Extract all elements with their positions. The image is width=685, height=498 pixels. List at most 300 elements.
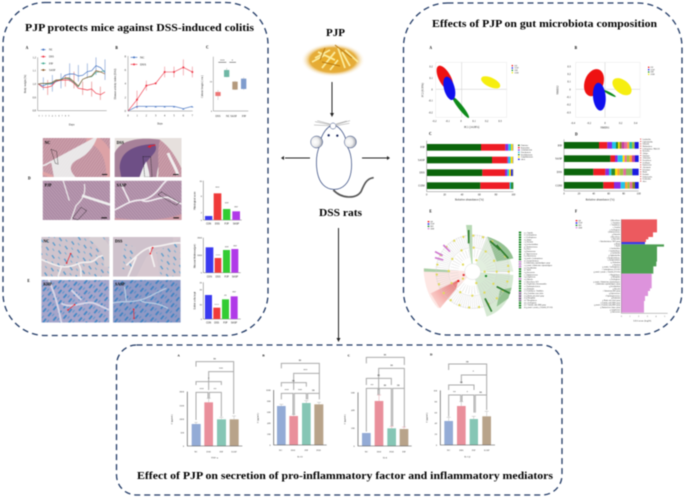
cladogram E: LEfSe: COM [430, 228, 435, 230]
stacked bar chart D: genus abundance: Parabacteroides [643, 176, 652, 178]
bar chart F: LDA score: 5 [664, 316, 665, 318]
bar chart D: IL-1β: ns [479, 391, 482, 394]
stacked bar chart D: genus abundance: DSS [557, 170, 562, 174]
bar chart C: IL-6: PJP [402, 450, 406, 453]
legend: cladogram taxa: s: f_Staphylococcaceae [524, 273, 538, 276]
bar chart E: goblet cells: 10 [200, 304, 203, 306]
bar chart D: IL-1β: 80 [435, 400, 438, 403]
bar chart A: TNF-α: *** [219, 367, 224, 370]
image: PJP noodles [301, 43, 365, 77]
bar chart E: goblet cells: 0 [201, 319, 203, 321]
bar chart B: IL-10 [256, 354, 327, 458]
bar chart D: IL-1β: ns [460, 381, 463, 384]
bar chart C: IL-6: ** [371, 384, 374, 387]
scatter chart B: NMDS: SASP [651, 68, 655, 71]
stacked bar chart D: genus abundance: Ligilactobacillus [643, 140, 653, 143]
stacked bar chart C: phylum abundance: Actinobacteriota [521, 149, 532, 152]
legend: cladogram taxa: y: g_Romboutsia [524, 287, 535, 290]
line chart A: body weight [24, 46, 107, 126]
stacked bar chart C: phylum abundance: Relative abundance (%) [455, 198, 484, 202]
icon: rat [311, 121, 374, 197]
stacked bar chart C: phylum abundance: DSS [419, 171, 425, 175]
stacked bar chart C: phylum abundance: Proteobacteria [521, 152, 531, 154]
legend: cladogram taxa: q: c_Bacilli [524, 269, 531, 272]
scatter chart B: NMDS: 0.2 [619, 122, 623, 125]
scatter chart A: PCA: DSS [515, 70, 518, 72]
stacked bar chart D: genus abundance: D [575, 133, 578, 137]
arrow: to bottom panel [336, 228, 340, 342]
stacked bar chart C: phylum abundance: 60 [478, 193, 481, 196]
scatter chart B: NMDS: -0.4 [571, 122, 576, 125]
scatter chart A: PCA [421, 46, 519, 129]
bar chart E: goblet cells: 20 [200, 290, 203, 292]
stacked bar chart D: genus abundance: SASP [555, 157, 562, 161]
bar chart A: TNF-α: 500 [180, 432, 185, 435]
stacked bar chart D: genus abundance: Lachnospiraceae_NK4A136 [643, 147, 660, 150]
bar chart F: LDA score: g_Blautia [614, 242, 620, 245]
bar chart C: IL-6: C [348, 353, 351, 357]
bar chart D: IL-1β: 0 [436, 444, 438, 447]
bar chart E: mucosal thickness: PJP [225, 276, 229, 278]
bar chart C: IL-6: ns [384, 353, 386, 356]
bar chart D: IL-1β: * [467, 391, 469, 394]
line chart B: disease activity index: 6 [125, 69, 127, 72]
scatter chart A: PCA: 0.1 [429, 77, 433, 80]
bar chart F: LDA score: g_Romboutsia [611, 297, 620, 300]
bar chart C: IL-6 [343, 353, 412, 460]
bar chart A: TNF-α: 2000 [179, 391, 185, 394]
image: SASP AB-PAS [112, 279, 182, 324]
legend: cladogram taxa: a6: g_norank_f_norank_o_Clostridia_UCG-014 [524, 306, 553, 309]
line chart A: body weight: 0.9 [33, 96, 37, 99]
box chart C: colon length: PJP [242, 115, 247, 118]
line chart B: disease activity index: Days [157, 122, 163, 125]
stacked bar chart D: genus abundance: Lactobacillus [643, 139, 651, 141]
scatter chart B: NMDS: 0.1 [567, 81, 571, 84]
line chart B: disease activity index: 7 [192, 115, 194, 118]
image: DSS H&E: DSS [117, 140, 125, 145]
scatter chart B: NMDS: -0.3 [566, 111, 571, 114]
bar chart D: histological score [194, 181, 242, 226]
stacked bar chart D: genus abundance: Helicobacter [643, 169, 651, 171]
bar chart C: IL-6: NC [365, 450, 368, 453]
bar chart F: LDA score: g_Allobaculum [610, 261, 621, 264]
stacked bar chart C: phylum abundance: 80 [495, 193, 498, 196]
bar chart B: IL-10: 400 [267, 422, 271, 425]
bar chart B: IL-10: C (pg/mL) [256, 413, 259, 423]
stacked bar chart D: genus abundance: Alistipes [643, 152, 648, 155]
line chart A: body weight: 1.0 [33, 83, 37, 86]
bar chart E: goblet cells: **** [214, 303, 220, 306]
bar chart C: IL-6: ns [390, 364, 393, 367]
stacked bar chart D: genus abundance: PJP [558, 144, 562, 148]
bar chart D: histological score: 2 [201, 212, 203, 214]
bar chart E: mucosal thickness [194, 238, 241, 278]
line chart B: disease activity index [114, 46, 194, 125]
stacked bar chart D: genus abundance: Muribaculaceae [643, 146, 652, 148]
stacked bar chart C: phylum abundance: PJP [420, 145, 425, 149]
line chart B: disease activity index: 5 [173, 115, 175, 118]
legend: cladogram taxa: d: g_Blautia [524, 238, 532, 241]
line chart B: disease activity index: 0 [125, 110, 127, 113]
legend: cladogram taxa: o: g_norank_f_Eubacterium_coprostanoligenes [524, 264, 553, 267]
bar chart F: LDA score: COM [578, 227, 583, 229]
bar chart F: LDA score: f_Rikenellaceae [610, 219, 620, 222]
bar chart F: LDA score: f_Ruminococcaceae [607, 231, 620, 234]
bar chart F: LDA score: 0 [621, 316, 622, 318]
scatter chart B: NMDS: -0.2 [587, 122, 592, 125]
legend: cladogram taxa: j: f_Butyricicoccaceae [523, 252, 538, 255]
bar chart D: IL-1β: 20 [435, 433, 438, 436]
panel: Effects of PJP on gut microbiota composition [404, 3, 682, 335]
bar chart D: histological score: Histological score [194, 191, 197, 210]
bar chart B: IL-10: IL-10 [297, 455, 303, 458]
stacked bar chart C: phylum abundance: 0 [426, 193, 428, 196]
line chart B: disease activity index: 6 [183, 115, 185, 118]
bar chart F: LDA score: f_Erysipelotrichaceae [607, 256, 620, 259]
bar chart F: LDA score: g_Enterococcus [610, 311, 620, 314]
bar chart A: TNF-α: * [208, 377, 210, 380]
bar chart F: LDA score: f_Enterobacteriaceae_RF39_group [599, 240, 620, 243]
bar chart C: IL-6: DSS [377, 450, 382, 453]
bar chart B: IL-10: 0 [269, 444, 271, 447]
legend: cladogram taxa: c: f_Oscillospiraceae [524, 236, 537, 239]
legend: cladogram taxa [520, 232, 553, 309]
bar chart F: LDA score: f_Eubacterium_coprostanoligenes_group [595, 283, 620, 286]
legend: cladogram taxa: a: o_Clostridia [524, 232, 533, 234]
bar chart E: goblet cells: CON [206, 323, 212, 325]
line chart A: body weight: 1.1 [33, 70, 37, 73]
legend: cladogram taxa: a0: g_Clostridium_sensu_stricto [524, 292, 544, 295]
bar chart D: histological score: PJP [225, 224, 229, 226]
bar chart A: TNF-α: TNF- α [211, 457, 219, 460]
line chart A: body weight: PJP [49, 62, 54, 65]
bar chart D: histological score: CON [206, 224, 212, 226]
bar chart E: goblet cells: ### [232, 291, 237, 294]
bar chart D: IL-1β: SASP [484, 449, 490, 452]
bar chart C: IL-6: ns [377, 374, 380, 377]
stacked bar chart D: genus abundance: Akkermansia [643, 166, 651, 169]
stacked bar chart C: phylum abundance: Bacteroidota [521, 147, 530, 149]
bar chart B: IL-10: 600 [267, 411, 271, 414]
bar chart D: histological score: DSS [215, 224, 220, 226]
image: NC AB-PAS [40, 236, 110, 278]
bar chart D: histological score: 0 [201, 220, 203, 222]
scatter chart B: NMDS: -0.1 [566, 96, 571, 99]
line chart B: disease activity index: 2 [125, 96, 127, 99]
bar chart C: IL-6: ns [384, 384, 386, 387]
line chart B: disease activity index: Disease activity index (DAI) [114, 69, 117, 99]
bar chart E: mucosal thickness: 2000 [197, 238, 203, 240]
bar chart E: goblet cells: 25 [200, 282, 203, 284]
line chart B: disease activity index: NC [140, 56, 145, 60]
scatter chart B: NMDS: COM [651, 74, 655, 76]
scatter chart B: NMDS: 0.3 [567, 65, 571, 68]
bar chart F: LDA score: f_Rikenellaceae [610, 235, 620, 238]
bar chart B: IL-10: *** [303, 369, 308, 372]
bar chart F: LDA score: g_Faecalibaculum [609, 285, 621, 288]
bar chart B: IL-10: DSS [291, 449, 296, 452]
image: NC AB-PAS: NC [43, 239, 49, 244]
bar chart F: LDA score: g_Monoglobus [611, 276, 620, 279]
line chart B: disease activity index: B [115, 46, 118, 50]
bar chart F: LDA score: o_Clostridiales [611, 222, 620, 224]
panel: Effect of PJP on secretion of pro-inflammatory factor and inflammatory mediators [116, 345, 562, 495]
scatter chart B: NMDS: PJP [651, 67, 653, 69]
bar chart B: IL-10: *** [285, 389, 289, 392]
label: DSS rats: DSS rats [319, 207, 363, 219]
line chart B: disease activity index: 2 [146, 115, 148, 118]
scatter chart A: PCA: 0.3 [498, 120, 502, 123]
bar chart D: IL-1β [426, 353, 495, 458]
box chart C: colon length: *** [220, 58, 225, 62]
stacked bar chart C: phylum abundance [418, 132, 533, 202]
arrow: to right panel [362, 156, 390, 160]
bar chart D: histological score: ### [234, 205, 239, 208]
bar chart F: LDA score: g_Blautia_and_related_group [602, 299, 620, 302]
bar chart E: goblet cells [194, 282, 241, 325]
image: SASP AB-PAS: SASP [115, 282, 125, 287]
bar chart A: TNF-α: *** [200, 388, 204, 391]
bar chart A: TNF-α [171, 354, 242, 460]
cladogram E: LEfSe: PJP [430, 221, 433, 223]
bar chart B: IL-10: POS [317, 449, 322, 452]
bar chart F: LDA score: g_Ligilactobacillus [608, 254, 620, 257]
scatter chart A: PCA: PC1 (14.08%) [464, 126, 479, 129]
bar chart F: LDA score: SASP [578, 222, 582, 225]
bar chart D: histological score: 10 [200, 181, 203, 183]
bar chart E: goblet cells: PJP [223, 323, 228, 325]
stacked bar chart D: genus abundance: others [643, 181, 647, 183]
bar chart D: IL-1β: 100 [433, 389, 438, 392]
scatter chart A: PCA: 0.2 [429, 66, 433, 69]
bar chart E: mucosal thickness: **** [216, 254, 221, 257]
bar chart F: LDA score: g_Ruminococcus_torques_group [600, 306, 620, 309]
image: KHP AB-PAS: KHP [43, 282, 53, 287]
bar chart A: TNF-α: ns [213, 357, 216, 360]
box chart C: colon length: C [206, 46, 209, 50]
center column: PJP treatment and DSS rat model [281, 27, 390, 342]
stacked bar chart D: genus abundance: 100 [637, 193, 641, 196]
stacked bar chart C: phylum abundance: others [521, 159, 525, 161]
bar chart B: IL-10: ns [312, 389, 315, 392]
line chart B: disease activity index: 8 [125, 55, 127, 58]
legend: cladogram taxa: v: f_Rikenellaceae_RC9 [524, 280, 539, 283]
heading: left panel title: PJP protects mice against DSS-induced colitis [25, 22, 255, 34]
line chart A: body weight: 0.8 [33, 110, 37, 113]
bar chart F: LDA score: PJP [578, 220, 581, 222]
bar chart F: LDA score: 3 [647, 316, 648, 318]
bar chart F: LDA score: c_Clostridia [612, 227, 620, 229]
image: PJP H&E [42, 180, 111, 221]
bar chart F: LDA score: g_norank_f_norank_o_Clostridia_UCG-014 [593, 270, 620, 273]
bar chart A: TNF-α: 1500 [179, 404, 185, 407]
stacked bar chart D: genus abundance: Oscillibacter [643, 162, 651, 164]
bar chart F: LDA score: f_Monoglobaceae [609, 273, 620, 276]
bar chart F: LDA score: o_Oscillospirales [609, 279, 620, 281]
bar chart E: mucosal thickness: 0 [201, 273, 203, 275]
stacked bar chart C: phylum abundance: Campilobacterota [521, 157, 533, 159]
line chart A: body weight: Body weight (%) [24, 75, 27, 93]
bar chart E: mucosal thickness: DSS [216, 276, 221, 278]
stacked bar chart D: genus abundance: Ruminococcus [643, 165, 652, 167]
image: DSS H&E [114, 138, 182, 178]
image: NC H&E [42, 137, 111, 178]
bar chart F: LDA score: g_Rikenella [613, 287, 620, 290]
bar chart E: mucosal thickness: CON [207, 276, 212, 278]
bar chart A: TNF-α: PJP [220, 450, 224, 453]
legend: cladogram taxa: a2: g_Monoglobus [524, 297, 536, 300]
bar chart D: histological score: SASP [233, 223, 240, 226]
bar chart F: LDA score: 1 [630, 316, 631, 318]
legend: cladogram taxa: p: g_Faecalibaculum [524, 266, 537, 269]
cladogram E: LEfSe: E [429, 210, 432, 214]
bar chart F: LDA score: 4 [656, 316, 657, 318]
bar chart A: TNF-α: A [177, 354, 180, 358]
histology images E: AB-PAS stained colon [27, 235, 181, 323]
legend: cladogram taxa: u: g_Rikenella [524, 278, 533, 281]
stacked bar chart D: genus abundance: Relative abundance (%) [586, 197, 614, 201]
legend: cladogram taxa: a5: f_Clostridia_vadin_BB60_group [524, 304, 546, 307]
scatter chart A: PCA: 0.2 [485, 120, 489, 123]
scatter chart A: PCA: 0 [460, 120, 462, 123]
legend: cladogram taxa: h: g_Dorea [524, 248, 531, 251]
legend: cladogram taxa: a4: o_Oscillospirales [524, 302, 537, 304]
legend: cladogram taxa: t: g_Jeotgalicoccus [524, 276, 536, 279]
bar chart D: histological score: *** [215, 187, 220, 190]
line chart A: body weight: Days [69, 123, 74, 126]
bar chart D: IL-1β: 60 [435, 411, 438, 414]
line chart B: disease activity index: DSS [140, 63, 146, 67]
cladogram E: LEfSe [423, 210, 513, 317]
stacked bar chart D: genus abundance: Desulfovibrio [643, 178, 651, 181]
scatter chart A: PCA: -0.1 [446, 120, 450, 123]
bar chart E: goblet cells: Goblet cells/crypt [194, 291, 197, 310]
line chart B: disease activity index: 3 [155, 115, 157, 118]
bar chart F: LDA score: o_Oscillospirales [609, 229, 620, 231]
bar chart F: LDA score: g_Lactobacillus [610, 252, 620, 255]
bar chart F: LDA score: f_Eubacterium_hallii_group [603, 290, 620, 293]
stacked bar chart D: genus abundance: Prevotellaceae [643, 160, 652, 162]
stacked bar chart D: genus abundance: COM [556, 183, 562, 187]
bar chart D: IL-1β: 40 [435, 422, 438, 425]
bar chart F: LDA score: g_Peptococcaceae [609, 292, 620, 295]
bar chart B: IL-10: B [262, 354, 265, 358]
heading: bottom panel title: Effect of PJP on secretion of pro-inflammatory factor and inflammatory mediators [137, 470, 554, 482]
stacked bar chart D: genus abundance: 40 [592, 193, 596, 196]
scatter chart B: NMDS: B [575, 46, 578, 50]
stacked bar chart D: genus abundance: Allobaculum [643, 157, 651, 160]
scatter chart B: NMDS: 0 [604, 122, 606, 125]
stacked bar chart C: phylum abundance: Firmicutes [521, 145, 528, 147]
bar chart F: LDA score: f_Clostridiaceae [610, 224, 620, 227]
line chart A: body weight: DSS [49, 56, 54, 59]
legend: cladogram taxa: w: c_Negativicutes_Selenomonadales [524, 283, 547, 286]
bar chart A: TNF-α: 0 [183, 445, 185, 448]
bar chart D: histological score: ### [225, 201, 229, 204]
scatter chart B: NMDS: NMDS1 [600, 127, 610, 130]
bar chart D: IL-1β: DSS [459, 449, 464, 452]
scatter chart A: PCA: -0.2 [432, 120, 437, 123]
stacked bar chart D: genus abundance: 60 [607, 193, 611, 196]
image: PJP H&E: PJP [45, 183, 52, 188]
legend: cladogram taxa: k: g_Butyricicoccus [524, 255, 536, 258]
scatter chart A: PCA: SASP [515, 67, 519, 70]
stacked bar chart D: genus abundance: Odoribacter [643, 155, 650, 157]
bar chart E: goblet cells: SASP [231, 322, 238, 325]
arrow: to left panel [281, 156, 310, 160]
bar chart F: LDA score: F [575, 210, 578, 214]
scatter chart A: PCA: PJP [515, 65, 517, 67]
histology images E: AB-PAS stained colon: E [27, 279, 30, 283]
stacked bar chart C: phylum abundance: 40 [461, 193, 464, 196]
bar chart D: IL-1β: C (pg/mL) [426, 413, 429, 423]
legend: cladogram taxa: g: f_Ruminococcaceae [524, 245, 538, 248]
bar chart F: LDA score: g_Bacteroides [611, 238, 620, 241]
heading: right panel title: Effects of PJP on gut microbiota composition [432, 18, 657, 30]
bar chart F: LDA score: f_Lactobacillaceae [608, 249, 620, 252]
legend: cladogram taxa: z: f_Clostridiaceae_Clostridiales [524, 290, 544, 293]
bar chart D: IL-1β: IL-1 β [464, 455, 471, 458]
legend: cladogram taxa: m: f_Erysipelotrichaceae [524, 259, 539, 262]
bar chart D: histological score: 6 [201, 196, 203, 198]
box chart C: colon length: DSS [216, 115, 221, 118]
legend: cladogram taxa: r: g_Enterococcus [524, 271, 535, 274]
bar chart B: IL-10: ns [299, 359, 301, 362]
legend: cladogram taxa: i: g_Ruminococcus [524, 250, 536, 253]
bar chart C: IL-6: 0 [353, 445, 355, 448]
stacked bar chart D: genus abundance: Roseburia [643, 174, 649, 176]
line chart B: disease activity index: 4 [164, 115, 166, 118]
legend: cladogram taxa: l: g_norank_f_Lachnospiraceae [524, 257, 543, 260]
stacked bar chart D: genus abundance: Dubosiella [643, 144, 649, 146]
bar chart B: IL-10: PJP [305, 449, 309, 452]
legend: cladogram taxa: a1: g_Blautia_and_related_group [524, 294, 544, 297]
image: KHP AB-PAS [40, 279, 110, 324]
bar chart F: LDA score: g_norank_f_Clostridia_vadin_BB60_group [594, 304, 620, 307]
box chart C: colon length: Colonic length ( cm ) [201, 75, 204, 98]
bar chart F: LDA score: g_Roseburia [612, 263, 620, 266]
scatter chart B: NMDS: 0 [569, 88, 571, 91]
bar chart F: LDA score: o_Lactobacillales [609, 248, 620, 250]
scatter chart A: PCA: -0.1 [428, 100, 433, 103]
cladogram E: LEfSe: SASP [430, 223, 434, 226]
heading: PJP: PJP [326, 27, 345, 39]
stacked bar chart D: genus abundance [555, 133, 660, 201]
scatter chart A: PCA: -0.2 [428, 111, 433, 114]
bar chart A: TNF-α: NC [194, 450, 198, 453]
line chart B: disease activity index: 0 [127, 115, 129, 118]
box chart C: colon length: * [232, 58, 234, 62]
bar chart E: goblet cells: DSS [214, 323, 220, 325]
stacked bar chart C: phylum abundance: Desulfobacterota [521, 153, 533, 156]
bar chart D: IL-1β: PJP [472, 449, 476, 452]
scatter chart A: PCA: A [429, 46, 432, 50]
stacked bar chart C: phylum abundance: C [429, 132, 432, 136]
legend: cladogram taxa: b: f_Lachnospiraceae [524, 234, 537, 237]
bar chart E: goblet cells: ## [224, 294, 227, 297]
scatter chart B: NMDS: 0.4 [634, 122, 638, 125]
bar chart C: IL-6: 400 [351, 409, 355, 412]
stacked bar chart D: genus abundance: 0 [563, 193, 565, 196]
scatter chart A: PCA: COM [515, 72, 519, 74]
image: SASP H&E: SASP [117, 183, 127, 188]
cladogram E: LEfSe: DSS [430, 226, 433, 228]
bar chart D: IL-1β: * [473, 371, 475, 374]
scatter chart B: NMDS: NMDS2 [557, 85, 560, 95]
stacked bar chart D: genus abundance: Blautia [643, 172, 647, 174]
bar chart D: IL-1β: ** [453, 391, 456, 394]
